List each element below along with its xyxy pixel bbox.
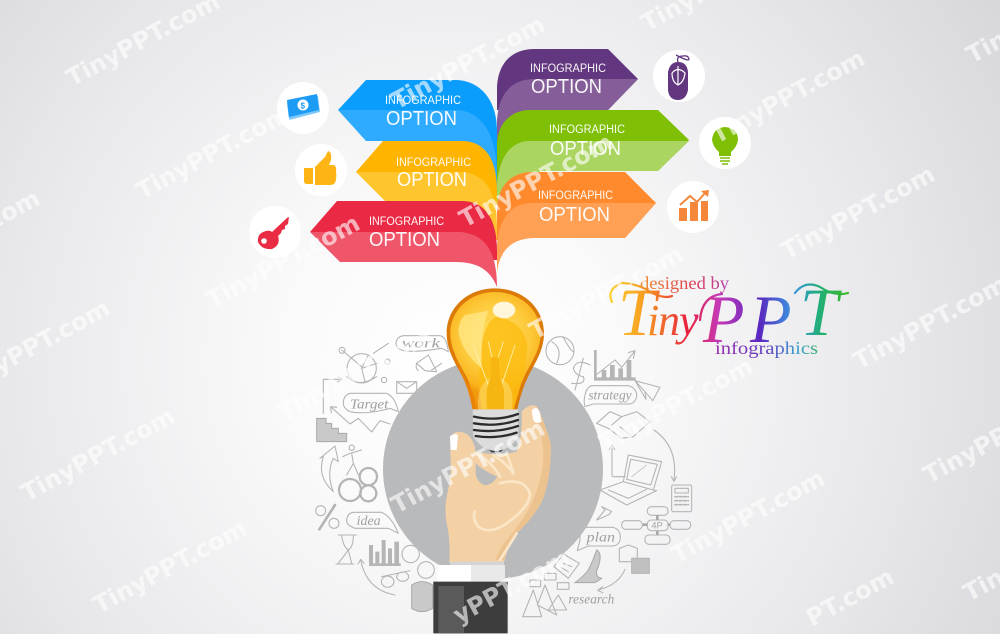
doodle: curved arrow right — [654, 430, 677, 481]
doodle: zigzag arrow — [331, 407, 390, 432]
purple label: OPTION — [531, 76, 602, 98]
watermarks: PT.com — [802, 563, 899, 632]
doodle: coin stack — [412, 582, 433, 612]
logo: TinyPPT: n — [658, 296, 680, 345]
finger creases — [474, 455, 530, 560]
red label: INFOGRAPHIC — [369, 216, 444, 228]
arrow: purple — [497, 49, 638, 150]
doodle: clipboard — [554, 554, 579, 578]
icon: money — [277, 82, 329, 134]
doodle: bars and coin — [369, 540, 419, 566]
fingernails — [450, 408, 542, 450]
green label — [549, 124, 625, 160]
doodle: envelope — [397, 382, 417, 393]
logo: infographics: infographics — [715, 338, 818, 358]
inner core — [479, 317, 527, 409]
sleeve cuff — [438, 565, 505, 582]
bulb glass — [447, 288, 544, 409]
watermarks: TinyPPT.com — [17, 402, 180, 507]
doodle: handshake — [597, 412, 650, 438]
hand — [445, 405, 551, 563]
arrow: orange — [497, 172, 656, 272]
logo swashes — [610, 283, 848, 320]
doodle: target bubble — [343, 393, 398, 413]
yellow label — [396, 157, 471, 191]
red label — [369, 216, 444, 251]
doodle: 4P diagram: 4P — [651, 521, 663, 531]
doodle: megaphone — [416, 355, 442, 372]
orange label: INFOGRAPHIC — [538, 190, 613, 202]
doodle: rising chart — [594, 350, 636, 381]
purple label: INFOGRAPHIC — [530, 63, 606, 75]
doodle: long curved arrow — [358, 559, 395, 595]
logo: TinyPPT: P — [702, 281, 745, 357]
doodle: calculator — [672, 485, 692, 512]
doodle: plan bubble — [577, 527, 620, 551]
icon: key — [249, 206, 301, 258]
arrow: red — [310, 201, 497, 287]
logo: TinyPPT: y — [675, 296, 699, 345]
icon: green bulb — [699, 117, 751, 169]
icon: thumbs up — [295, 144, 347, 196]
light bulb — [447, 288, 544, 452]
doodle: paper plane — [635, 381, 660, 401]
watermarks: TinyPPT.com — [525, 240, 688, 345]
doodle: 4P diagram — [622, 507, 691, 544]
doodle: plan bubble: plan — [586, 531, 615, 546]
grey circle — [383, 359, 603, 579]
watermarks: TinyPPT.com — [387, 10, 550, 115]
gap between fingers — [476, 463, 497, 485]
arrow: green — [497, 110, 689, 205]
blue label — [385, 95, 461, 130]
doodle: idea bubble: idea — [357, 514, 381, 529]
doodle: up arrow — [609, 445, 625, 477]
doodle: target bubble: Target — [350, 397, 390, 412]
red label: OPTION — [369, 229, 440, 251]
watermarks: TinyPPT.com — [595, 352, 758, 457]
watermarks: TinyPPT.com — [707, 44, 870, 149]
doodle: strategy bubble: strategy — [588, 388, 632, 403]
watermarks: TinyPPT.com — [132, 100, 295, 205]
purple label — [530, 63, 606, 98]
watermarks: TinyPPT.com — [202, 209, 365, 314]
filament — [473, 342, 515, 385]
watermarks: yPPT.com — [449, 544, 575, 629]
watermarks: TinyPPT.com — [455, 128, 618, 233]
icon: money: $ — [300, 102, 306, 110]
watermarks: TinyPPT.com — [274, 322, 437, 427]
green label: INFOGRAPHIC — [549, 124, 625, 136]
doodle: pie chart — [339, 343, 390, 383]
logo: designed by TinyPPT infographics — [610, 273, 848, 358]
watermarks: TinyPPT.com — [667, 464, 830, 569]
doodle: percent — [316, 505, 339, 529]
logo: TinyPPT: P — [749, 281, 792, 357]
doodle: mountains — [523, 573, 569, 617]
blue label: OPTION — [386, 108, 457, 130]
orange label — [538, 190, 613, 226]
doodle: glasses — [381, 571, 410, 587]
watermarks: TinyPPT.com — [387, 414, 550, 519]
doodle: elbow arrow — [323, 377, 342, 413]
orange label: OPTION — [539, 204, 610, 226]
watermarks: TinyPPT.com — [777, 160, 940, 265]
logo: TinyPPT: i — [647, 296, 659, 345]
logo: designed by: designed by — [640, 273, 729, 293]
hand with cuff — [433, 405, 551, 633]
doodle: telephone — [575, 550, 602, 583]
doodle: work bubble — [396, 336, 448, 352]
doodle: curved arrow bottom — [598, 569, 625, 593]
screw base — [473, 409, 518, 452]
icon: mouse — [653, 50, 705, 102]
doodle: gears — [339, 468, 377, 501]
doodle: phone coin — [418, 562, 434, 578]
doodle: work bubble: work — [402, 337, 441, 352]
doodle: pin — [597, 507, 612, 520]
doodle: stairs — [317, 418, 347, 442]
doodle: idea bubble — [347, 512, 398, 533]
logo: TinyPPT: T — [800, 274, 842, 350]
doodle: laptop — [600, 455, 662, 505]
logo: TinyPPT: T — [618, 274, 660, 350]
watermarks: TinyPPT.com — [89, 514, 252, 619]
doodle: dollar sign — [572, 358, 590, 390]
doodle: strategy bubble — [584, 386, 637, 407]
arrow tree — [310, 49, 689, 287]
arrow: blue — [338, 80, 497, 200]
doodle ring — [316, 336, 692, 617]
doodle: runner — [343, 445, 362, 475]
glass highlights — [458, 311, 488, 368]
yellow label: INFOGRAPHIC — [396, 157, 471, 169]
blue label: INFOGRAPHIC — [385, 95, 461, 107]
doodle: cubes — [619, 545, 649, 573]
doodle: research text: research — [568, 592, 614, 607]
doodle: curved arrow — [320, 446, 338, 492]
hand shading — [495, 407, 551, 560]
dark sleeve — [433, 582, 508, 633]
green label: OPTION — [550, 138, 621, 160]
yellow label: OPTION — [397, 169, 467, 191]
doodle: hourglass — [336, 535, 357, 564]
doodle: globe — [546, 337, 574, 365]
icon: growth chart — [667, 181, 719, 233]
arrow: yellow — [356, 141, 497, 240]
